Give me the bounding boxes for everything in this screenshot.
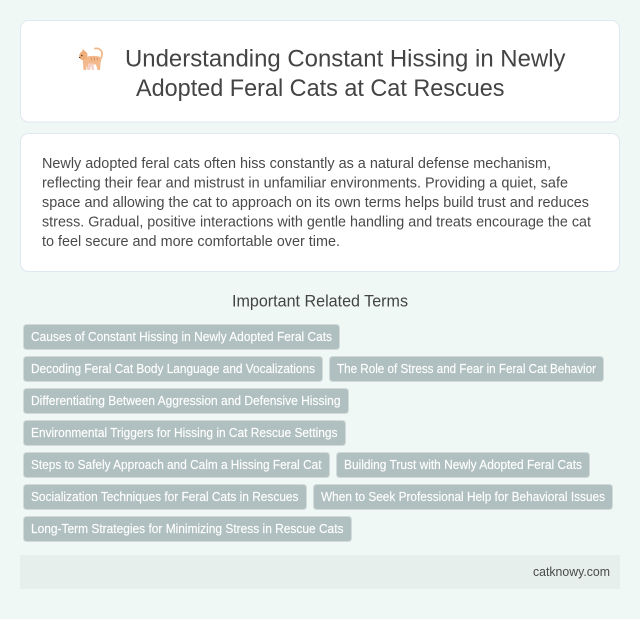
title text: [125, 46, 566, 102]
paragraph text: [42, 156, 591, 250]
paragraph text: Newly adopted feral cats often hiss constantly as a natural defense mechanism,: [42, 156, 551, 172]
panel: title card: [20, 20, 620, 122]
tag: long-term strategies: [24, 516, 352, 542]
title text: Adopted Feral Cats at Cat Rescues: [136, 75, 504, 102]
tag: safe approach: [24, 452, 330, 478]
tag: aggression: Differentiating Between Aggression and Defensive Hissing: [31, 394, 341, 408]
tag: socialization: Socialization Techniques for Feral Cats in Rescues: [31, 490, 298, 504]
tag: socialization: [24, 484, 306, 510]
tag: body language: [24, 356, 322, 382]
paragraph text: space and allowing the cat to approach on its own terms helps build trust and reduces: [42, 195, 589, 211]
paragraph text: reflecting their fear and mistrust in unfamiliar environments. Providing a quiet, safe: [42, 176, 568, 192]
tag group: related terms: [24, 324, 612, 542]
tag: stress and fear: [330, 356, 604, 382]
tag: professional help: [314, 484, 612, 510]
tag: building trust: [336, 452, 590, 478]
tag: stress and fear: The Role of Stress and Fear in Feral Cat Behavior: [337, 362, 596, 376]
tag: safe approach: Steps to Safely Approach and Calm a Hissing Feral Cat: [31, 458, 322, 472]
paragraph text: stress. Gradual, positive interactions with gentle handling and treats encourage the cat: [42, 214, 591, 230]
tag: environmental triggers: Environmental Triggers for Hissing in Cat Rescue Settings: [31, 426, 338, 440]
tag: building trust: Building Trust with Newly Adopted Feral Cats: [344, 458, 582, 472]
footer bar: [20, 555, 620, 589]
tag: aggression: [24, 388, 348, 414]
paragraph text: to feel secure and more comfortable over time.: [42, 234, 340, 250]
tag: causes: Causes of Constant Hissing in Newly Adopted Feral Cats: [31, 330, 332, 344]
tag: environmental triggers: [24, 420, 346, 446]
tag: long-term strategies: Long-Term Strategies for Minimizing Stress in Rescue Cats: [31, 522, 344, 536]
tag: professional help: When to Seek Professional Help for Behavioral Issues: [321, 490, 605, 504]
panel: description: [20, 134, 620, 272]
tag: body language: Decoding Feral Cat Body Language and Vocalizations: [31, 362, 315, 376]
title text: Understanding Constant Hissing in Newly: [125, 46, 566, 73]
footer source text: catknowy.com: [533, 564, 610, 579]
heading: related terms: Important Related Terms: [232, 293, 408, 311]
tag: causes: [24, 324, 340, 350]
icon: orange cat: [79, 48, 102, 70]
